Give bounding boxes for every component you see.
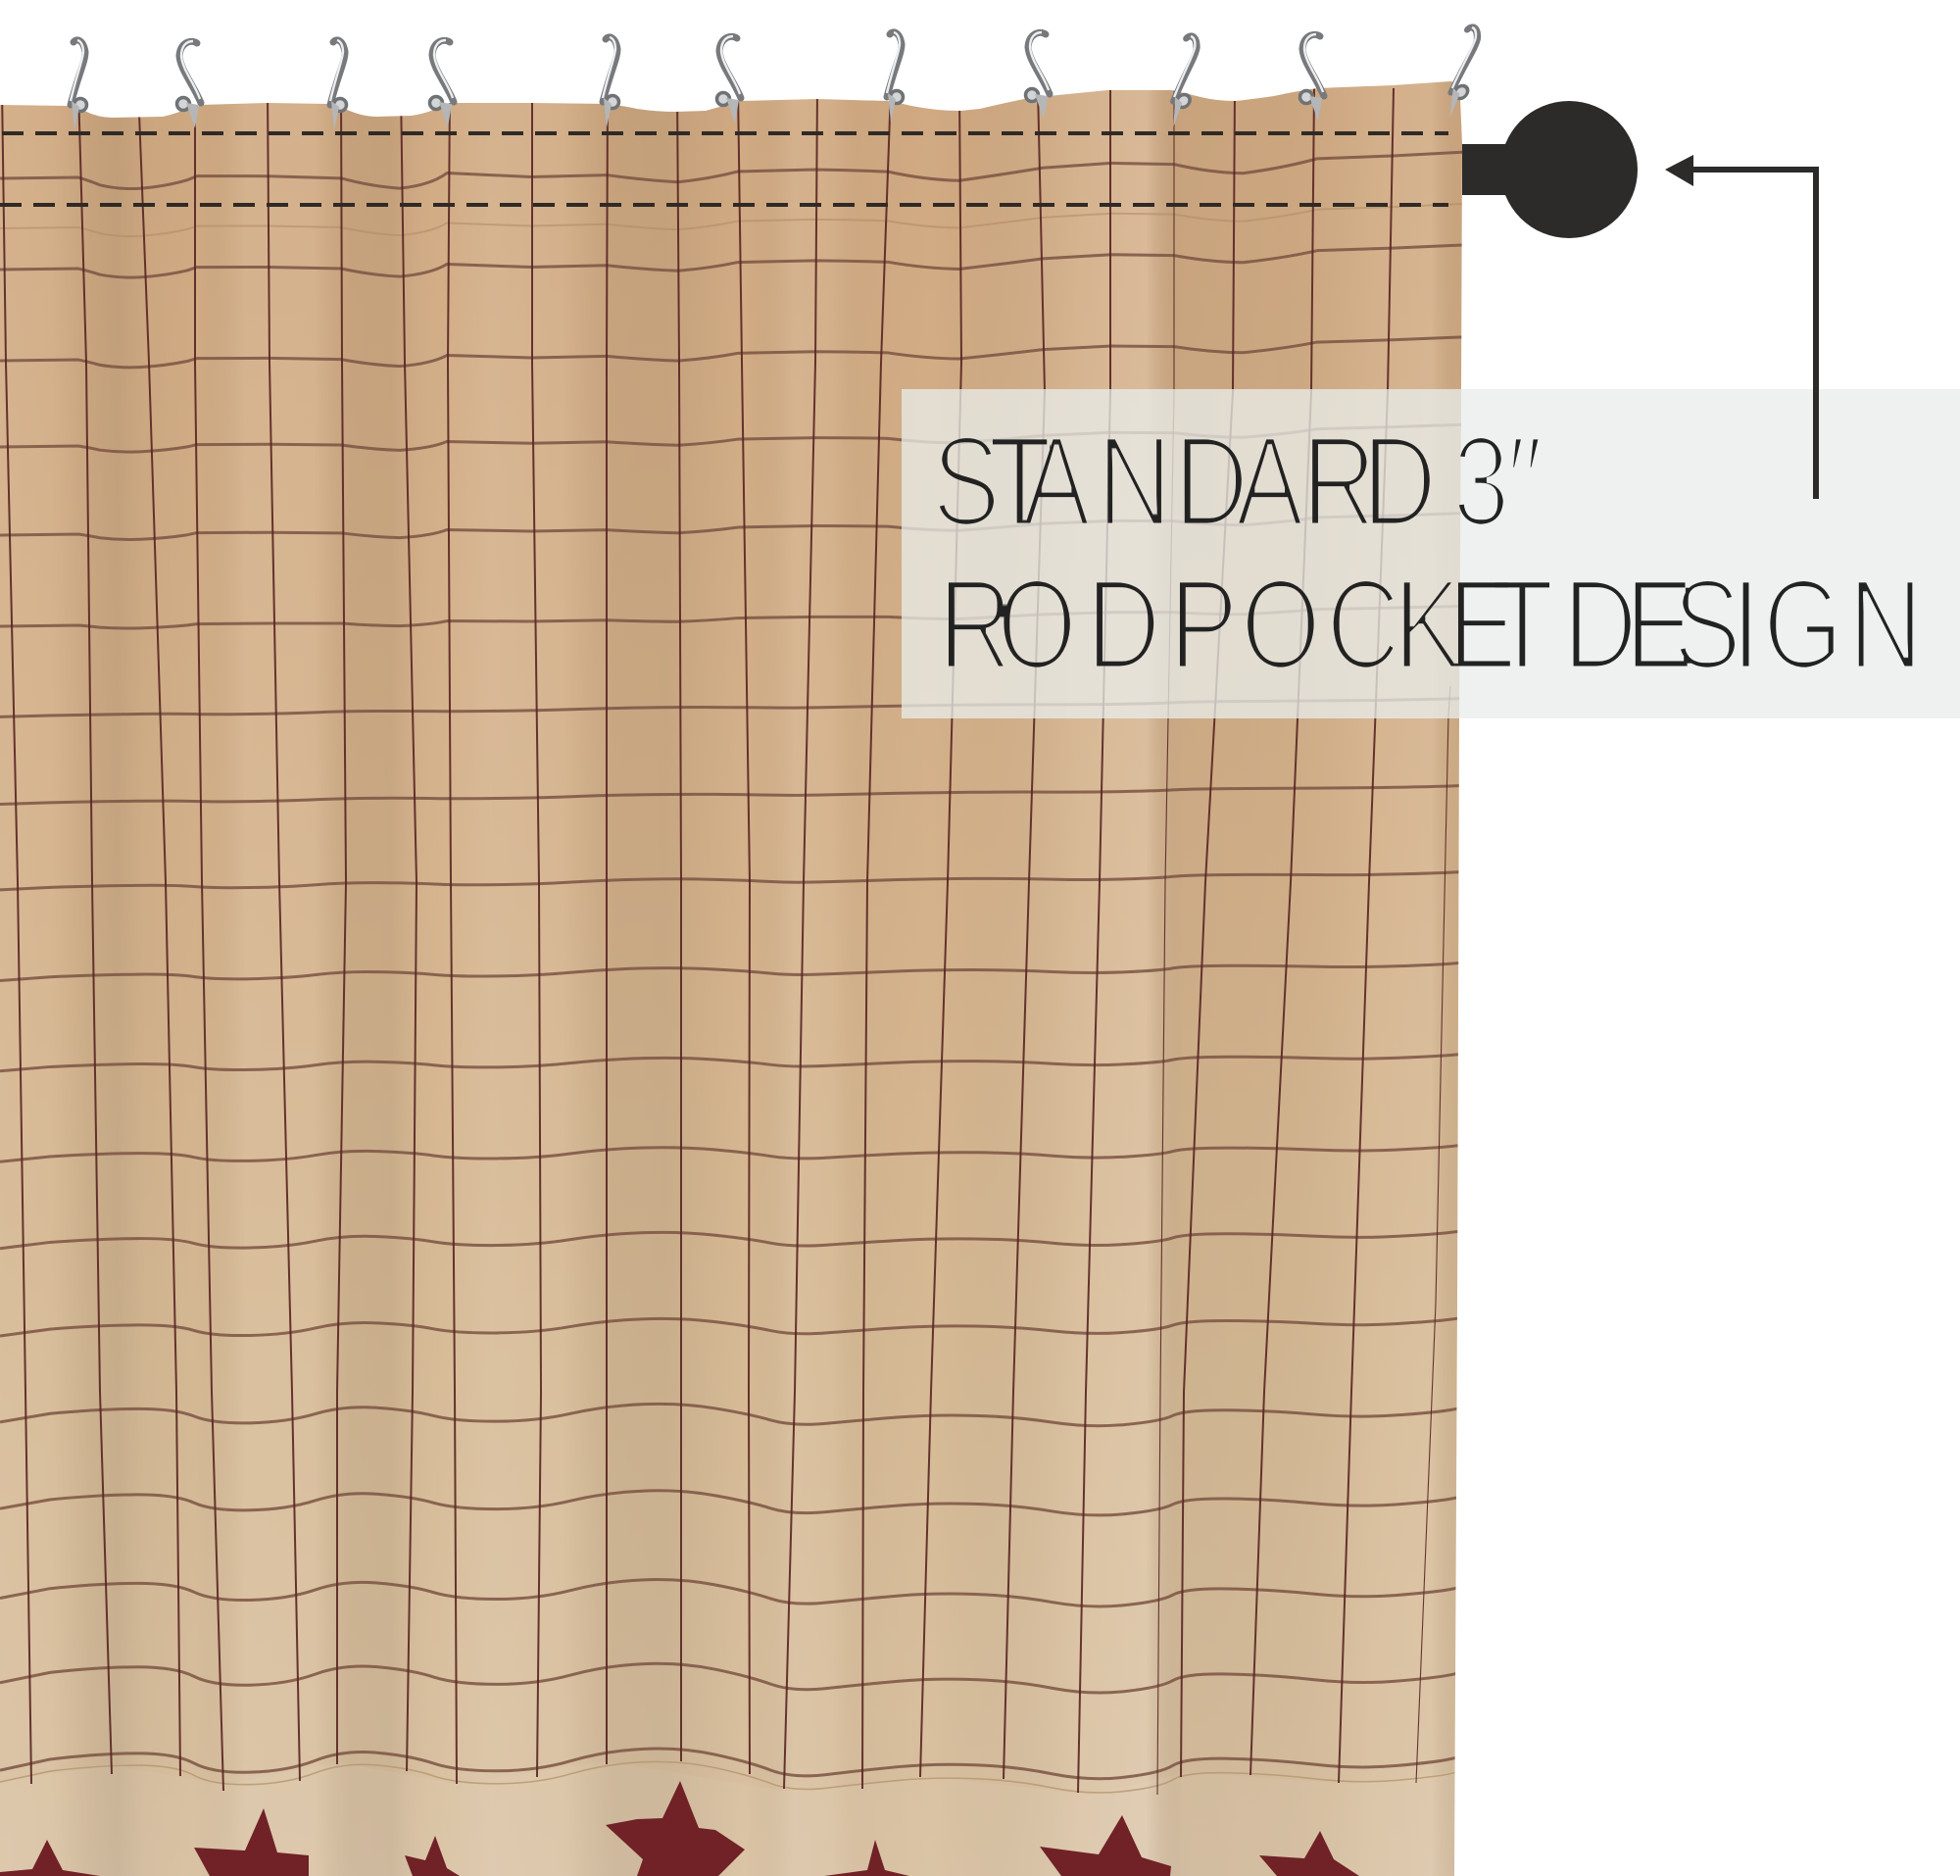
vertical plaid lines: [2, 88, 1450, 1795]
curtain hooks: [71, 27, 1482, 130]
curtain rod with round finial: [1462, 101, 1638, 238]
callout line 2: ROD POCKET DESIGN: [938, 554, 1923, 697]
hem stitching: [0, 1761, 1465, 1793]
curtain panel: [0, 69, 1470, 1876]
dashed rod pocket guide lines: [0, 133, 1448, 205]
curtain fabric: [0, 69, 1470, 1876]
callout panel: [902, 389, 1960, 718]
hem band: [0, 1761, 1465, 1876]
appliqued stars: [0, 1781, 1359, 1876]
callout line 1: STANDARD 3″: [932, 411, 1544, 554]
rod pocket seam: [0, 204, 1465, 240]
callout text: [932, 411, 1923, 697]
arrow pointing to rod: [1665, 155, 1816, 499]
horizontal plaid lines: [0, 152, 1465, 1781]
